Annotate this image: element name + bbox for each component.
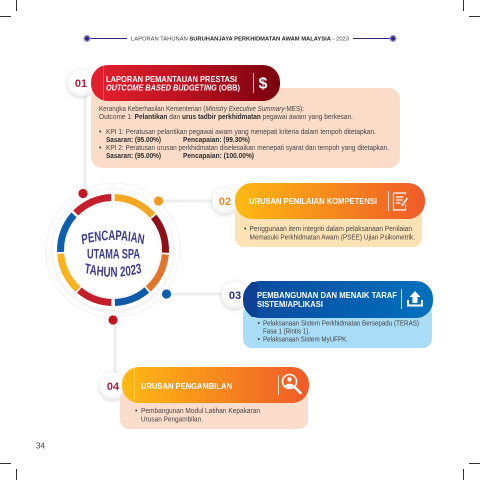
badge 02 xyxy=(212,188,238,214)
panel 02: urusan penilaian kompetensi xyxy=(212,183,425,247)
panel 03 text: Pelaksanaan Sistem Perkhidmatan Bersepadu (TERAS) xyxy=(263,320,419,328)
panel 01 text: Pencapaian: (99.30%) xyxy=(183,137,250,144)
icon: magnifier xyxy=(282,374,300,393)
icon: dollar: $ xyxy=(259,76,268,92)
panel 01 text: Pencapaian: (100.00%) xyxy=(183,153,254,160)
panel 03 heading: SISTEM/APLIKASI xyxy=(257,299,323,309)
panel 01 text: KPI 2: Peratusan urusan perkhidmatan diselesaikan menepati syarat dan tempoh yang ditetapkan. xyxy=(106,145,389,152)
running header: LAPORAN TAHUNAN SURUHANJAYA PERKHIDMATAN AWAM MALAYSIA - 2023 xyxy=(131,37,349,43)
badge 04 xyxy=(100,372,126,400)
panel 01: laporan pemantauan prestasi xyxy=(68,65,400,168)
ring segments xyxy=(39,176,187,324)
centre title: TAHUN 2023 xyxy=(85,263,142,277)
badge 03: 03 xyxy=(229,290,241,302)
panel 03 heading: PEMBANGUNAN DAN MENAIK TARAF xyxy=(257,290,397,300)
panel 01 text: KPI 1: Peratusan pelantikan pegawai awam yang menepati kriteria dalam tempoh ditetapkan. xyxy=(106,129,376,136)
panel 03 text: Pelaksanaan Sistem MyUFPK. xyxy=(263,337,348,344)
icon: document xyxy=(394,193,408,210)
panel 01 body xyxy=(91,88,400,168)
panel 04 text: • xyxy=(135,408,138,415)
central ring: pencapaian utama xyxy=(46,182,180,325)
panel 04: urusan pengambilan xyxy=(100,367,309,429)
badge 03 xyxy=(222,282,248,308)
panel 03 text xyxy=(258,320,419,344)
panel 03 text: • xyxy=(258,337,260,344)
panel 04 banner xyxy=(122,367,309,403)
panel 02 heading: URUSAN PENILAIAN KOMPETENSI xyxy=(249,196,377,206)
page number: 34 xyxy=(36,442,45,450)
panel 02 body xyxy=(235,205,422,247)
badge 04: 04 xyxy=(107,381,120,393)
panel 01 text: Outcome 1: Pelantikan dan urus tadbir perkhidmatan pegawai awam yang berkesan. xyxy=(99,114,353,121)
panel 03 banner xyxy=(243,281,433,318)
connector lines xyxy=(85,95,226,378)
panel 04 text: Urusan Pengambilan. xyxy=(141,416,203,424)
centre title: PENCAPAIAN xyxy=(82,230,144,244)
panel 03 heading xyxy=(257,290,397,309)
panel 02 text: Memasuki Perkhidmatan Awam (PSEE) Ujian Psikometrik. xyxy=(250,234,415,241)
panel 03 text: • xyxy=(258,320,260,328)
icon: upload xyxy=(407,291,423,306)
badge 02: 02 xyxy=(219,196,231,208)
panel 01 text: • xyxy=(99,129,102,136)
panel 01 text: Sasaran: (95.00%) xyxy=(106,153,161,160)
panel 01 heading: OUTCOME BASED BUDGETING (OBB) xyxy=(106,82,240,92)
panel 02 banner xyxy=(235,183,425,219)
panel 01 heading xyxy=(106,74,240,92)
panel 04 heading: URUSAN PENGAMBILAN xyxy=(141,381,232,391)
badge 01 xyxy=(68,70,94,96)
panel 04 body xyxy=(120,390,308,429)
badge 01: 01 xyxy=(75,78,87,90)
panel 01 text: Sasaran: (95.00%) xyxy=(106,137,161,144)
running header xyxy=(83,35,397,43)
centre title xyxy=(82,230,144,277)
panel 03 body xyxy=(243,305,432,348)
panel 02 text: Penggunaan item integriti dalam pelaksanaan Penilaian xyxy=(250,226,412,233)
panel 01 banner xyxy=(91,65,280,101)
ring dots xyxy=(78,185,171,325)
panel 01 text: • xyxy=(99,145,102,152)
panel 02 text xyxy=(244,226,415,241)
panel 03 text: Fasa 1 (Rintis 1). xyxy=(263,328,310,336)
panel 04 text xyxy=(135,408,260,424)
panel 01 text xyxy=(99,106,389,160)
centre title: UTAMA SPA xyxy=(87,246,140,262)
panel 04 text: Pembangunan Modul Latihan Kepakaran xyxy=(141,408,260,415)
panel 02 text: • xyxy=(244,226,247,233)
panel 01 text: Kerangka Keberhasilan Kementerian (Ministry Executive Summary-MES): xyxy=(99,106,304,113)
panel 01 heading: LAPORAN PEMANTAUAN PRESTASI xyxy=(106,74,237,84)
panel 03: pembangunan dan menaik taraf xyxy=(222,281,433,348)
